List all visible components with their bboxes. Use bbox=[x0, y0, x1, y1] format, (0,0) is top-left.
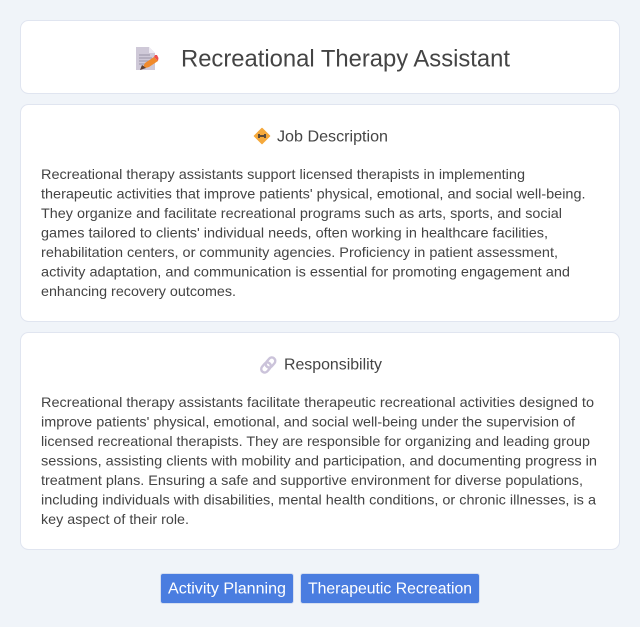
tag: activity planning: Activity Planning bbox=[168, 580, 286, 598]
heading: job description: Job Description bbox=[277, 128, 388, 146]
tag: therapeutic recreation bbox=[300, 574, 480, 604]
text block: job description: rehabilitation centers, or community agencies. Proficiency in patient assessment, bbox=[41, 244, 558, 260]
text block: job description: enhancing recovery outcomes. bbox=[41, 283, 236, 299]
icon: puzzle diamond bbox=[254, 128, 270, 144]
text block: responsibility: sessions, assisting clients with mobility and participation, and documenting progress in bbox=[41, 452, 597, 468]
text block: responsibility: Recreational therapy assistants facilitate therapeutic recreational activities designed to bbox=[41, 394, 594, 410]
text block: responsibility: licensed recreational therapists. They are responsible for organizing and leading group bbox=[41, 433, 590, 449]
panel: title card bbox=[20, 20, 620, 94]
icon: memo and pencil bbox=[136, 47, 158, 70]
text block: job description: therapeutic activities that improve patients' physical, emotional, and social well-being. bbox=[41, 186, 586, 202]
text block: responsibility bbox=[41, 394, 597, 527]
panel: responsibility bbox=[20, 332, 620, 550]
text block: responsibility: including individuals with disabilities, mental health conditions, or chronic illnesses, is a bbox=[41, 492, 596, 508]
text block: job description bbox=[41, 166, 586, 299]
text block: responsibility: key aspect of their role. bbox=[41, 511, 189, 527]
tag: activity planning bbox=[160, 574, 294, 604]
icon: chain link bbox=[260, 356, 277, 374]
text block: responsibility: improve patients' physical, emotional, and social well-being under the supervision of bbox=[41, 414, 575, 430]
text block: job description: games tailored to clients' individual needs, often working in healthcare facilities, bbox=[41, 224, 548, 240]
tag: therapeutic recreation: Therapeutic Recreation bbox=[308, 580, 472, 598]
text block: job description: They organize and facilitate recreational programs such as arts, sports, and social bbox=[41, 205, 562, 221]
panel: job description bbox=[20, 104, 620, 322]
text block: job description: Recreational therapy assistants support licensed therapists in implementing bbox=[41, 166, 525, 182]
heading: responsibility: Responsibility bbox=[284, 356, 382, 374]
text block: job description: activity adaptation, and communication is essential for promoting engagement and bbox=[41, 264, 570, 280]
text block: responsibility: treatment plans. Ensuring a safe and supportive environment for diverse populations, bbox=[41, 472, 583, 488]
title: Recreational Therapy Assistant bbox=[181, 46, 510, 72]
